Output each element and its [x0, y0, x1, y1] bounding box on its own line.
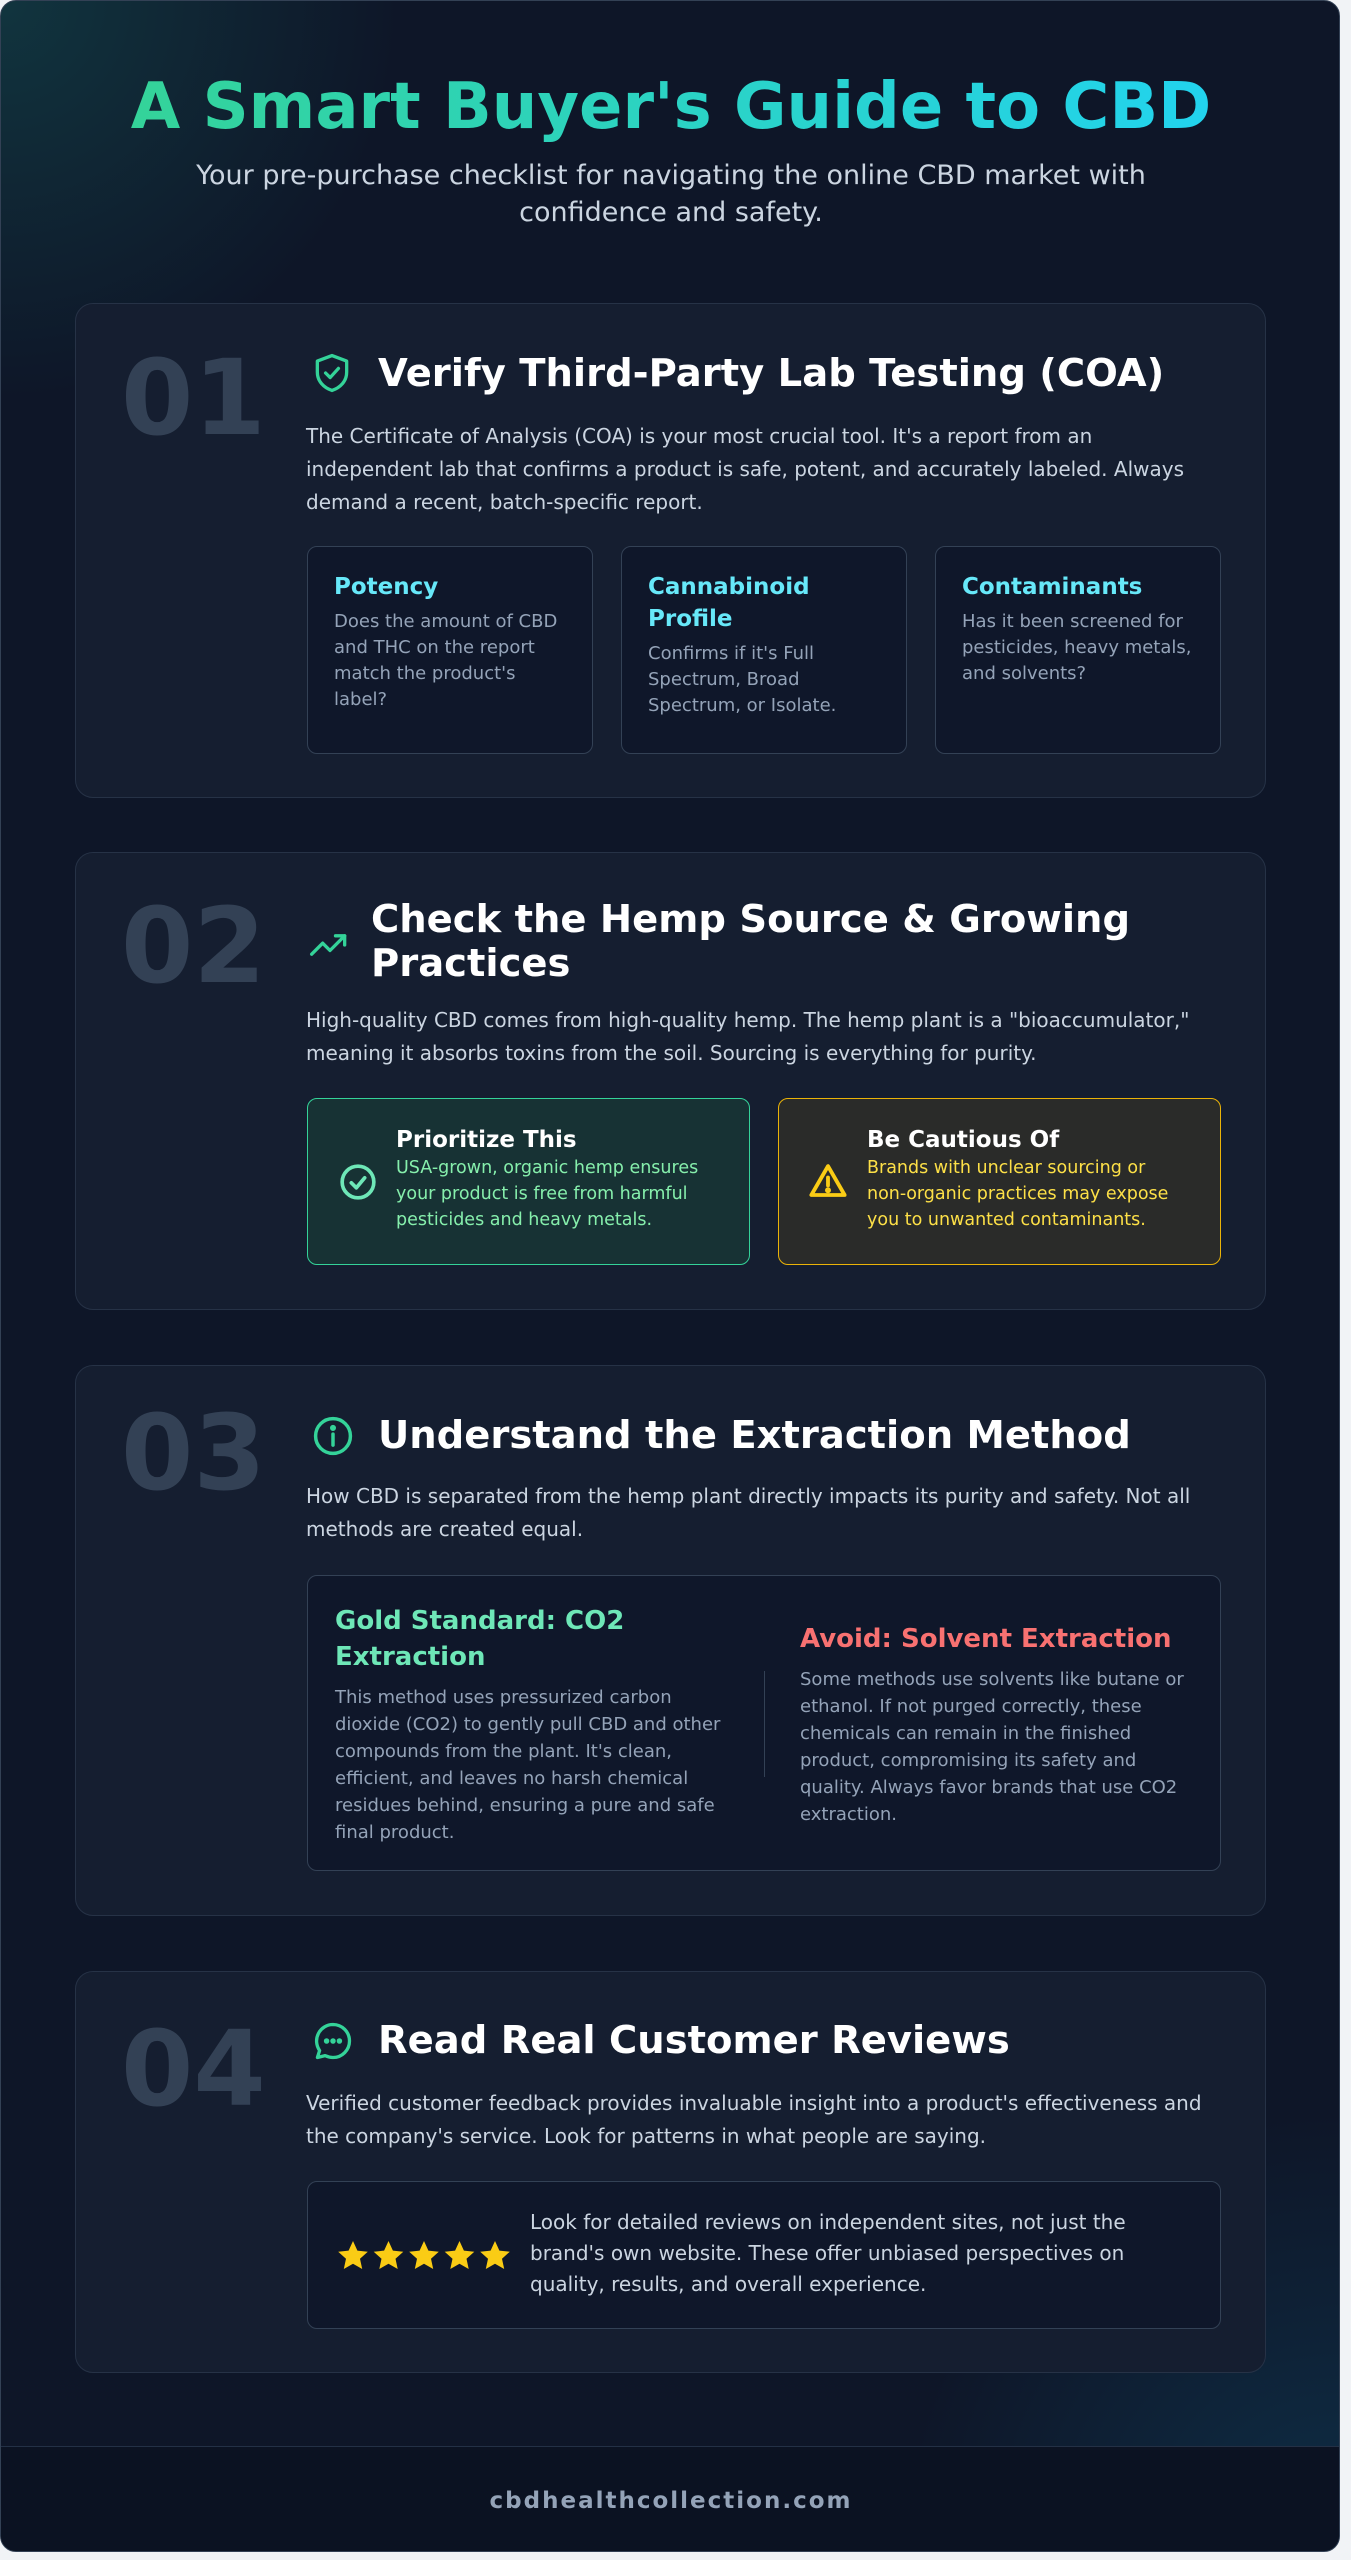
gold standard: This method uses pressurized carbon dioxide (CO2) to gently pull CBD and other compounds from the plant. It's clean, efficient, and leaves no harsh chemical residues behind, ensuring a pure and safe final product. — [335, 1687, 720, 1843]
icon: info — [314, 1416, 352, 1456]
panel: step 04 — [75, 1971, 1266, 2373]
number 02: 02 — [121, 885, 266, 1007]
icon: shield check — [316, 354, 348, 392]
subcard: contaminants — [935, 546, 1221, 754]
description: Verified customer feedback provides invaluable insight into a product's effectiveness and the company's service. Look for patterns in what people are saying. — [306, 2091, 1202, 2148]
text: Prioritize This — [396, 1127, 577, 1153]
avoid solvent: Avoid: Solvent Extraction — [800, 1624, 1172, 1654]
subcard: potency: Does the amount of CBD and THC on the report match the product's label? — [334, 611, 557, 710]
description: High-quality CBD comes from high-quality hemp. The hemp plant is a "bioaccumulator," meaning it absorbs toxins from the soil. Sourcing is everything for purity. — [306, 1008, 1189, 1065]
panel: step 02 — [75, 852, 1266, 1310]
review box — [307, 2181, 1221, 2329]
panel: step 01 — [75, 303, 1266, 798]
heading: Understand the Extraction Method — [378, 1413, 1131, 1458]
panel: step 03 — [75, 1365, 1266, 1916]
text — [867, 1127, 1168, 1230]
text: Be Cautious Of — [867, 1127, 1059, 1153]
footer — [1, 2446, 1341, 2553]
callout: prioritize — [307, 1098, 750, 1265]
subcard: cannabinoid profile: Confirms if it's Full Spectrum, Broad Spectrum, or Isolate. — [648, 643, 836, 716]
subcard: potency — [307, 546, 593, 754]
icon: five stars — [338, 2241, 510, 2269]
icon: warning — [809, 1164, 846, 1197]
heading: Read Real Customer Reviews — [378, 2018, 1010, 2063]
subcard: cannabinoid profile — [621, 546, 907, 754]
gold standard: Gold Standard: CO2 Extraction — [335, 1606, 624, 1672]
text: Brands with unclear sourcing or non‑organic practices may expose you to unwanted contaminants. — [867, 1158, 1168, 1230]
avoid solvent: Some methods use solvents like butane or ethanol. If not purged correctly, these chemicals can remain in the finished product, compromising its safety and quality. Always favor brands that use CO2 extraction. — [800, 1669, 1184, 1825]
subcard: potency: Potency — [334, 574, 438, 600]
callout: cautious — [778, 1098, 1221, 1265]
subcard: contaminants: Contaminants — [962, 574, 1142, 600]
gold standard — [334, 1606, 720, 1843]
icon: check circle — [340, 1164, 376, 1200]
heading: Verify Third-Party Lab Testing (COA) — [378, 351, 1164, 396]
comparison box — [307, 1575, 1221, 1871]
icon: trending up — [310, 934, 346, 956]
subcard: cannabinoid profile: Cannabinoid Profile — [648, 574, 810, 632]
title: A Smart Buyer's Guide to CBD — [131, 70, 1211, 144]
description: The Certificate of Analysis (COA) is your most crucial tool. It's a report from an independent lab that confirms a product is safe, potent, and accurately labeled. Always demand a recent, batch-specific report. — [306, 424, 1184, 514]
subtitle: Your pre-purchase checklist for navigating the online CBD market with confidence and safety. — [196, 160, 1146, 228]
icon: chat bubble — [314, 2022, 352, 2060]
number 04: 04 — [121, 2008, 266, 2130]
subcard: contaminants: Has it been screened for pesticides, heavy metals, and solvents? — [962, 611, 1192, 684]
text — [396, 1127, 698, 1230]
text: USA-grown, organic hemp ensures your product is free from harmful pesticides and heavy metals. — [396, 1158, 698, 1230]
number 01: 01 — [121, 337, 266, 459]
footer text: cbdhealthcollection.com — [490, 2488, 852, 2514]
review tip: Look for detailed reviews on independent sites, not just the brand's own website. These offer unbiased perspectives on quality, results, and overall experience. — [530, 2210, 1126, 2296]
heading: Check the Hemp Source & Growing Practices — [371, 897, 1130, 986]
number 03: 03 — [121, 1392, 266, 1514]
description: How CBD is separated from the hemp plant directly impacts its purity and safety. Not all methods are created equal. — [306, 1484, 1190, 1541]
